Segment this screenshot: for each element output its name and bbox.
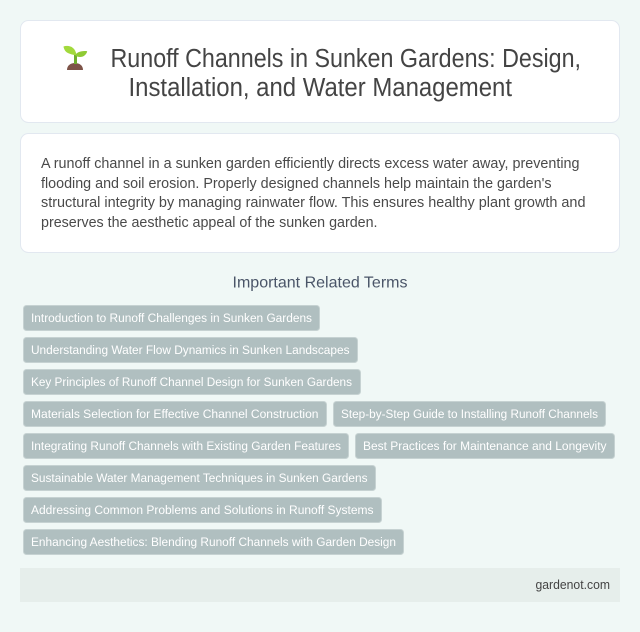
text block: description: structural integrity by managing rainwater flow. This ensures healthy plant growth and bbox=[41, 195, 586, 211]
tag: key principles: Key Principles of Runoff Channel Design for Sunken Gardens bbox=[31, 375, 352, 389]
tag: introduction: Introduction to Runoff Challenges in Sunken Gardens bbox=[31, 311, 312, 325]
tag: introduction bbox=[24, 306, 320, 330]
footer bbox=[20, 568, 620, 602]
tag: enhancing: Enhancing Aesthetics: Blending Runoff Channels with Garden Design bbox=[31, 535, 396, 549]
title: Runoff Channels in Sunken Gardens: Design, bbox=[110, 45, 581, 73]
tag: materials: Materials Selection for Effective Channel Construction bbox=[31, 407, 318, 421]
tag: sustainable bbox=[24, 466, 376, 490]
title bbox=[110, 45, 581, 102]
tag: integrating: Integrating Runoff Channels with Existing Garden Features bbox=[31, 439, 341, 453]
tag: step-by-step: Step-by-Step Guide to Installing Runoff Channels bbox=[341, 407, 598, 421]
heading: important related terms: Important Related Terms bbox=[232, 274, 408, 292]
text block: description: flooding and soil erosion. Properly designed channels help maintain the garden's bbox=[41, 176, 552, 192]
tag: enhancing bbox=[24, 530, 404, 554]
tag: best practices: Best Practices for Maintenance and Longevity bbox=[363, 439, 607, 453]
title: Installation, and Water Management bbox=[128, 74, 512, 102]
tag: step-by-step bbox=[334, 402, 606, 426]
tag: water flow bbox=[24, 338, 358, 362]
tag: key principles bbox=[24, 370, 360, 394]
text block: description: preserves the aesthetic appeal of the sunken garden. bbox=[41, 215, 378, 231]
text block: description: A runoff channel in a sunken garden efficiently directs excess water away, preventing bbox=[41, 156, 580, 172]
panel: title card bbox=[20, 20, 620, 122]
tag: sustainable: Sustainable Water Management Techniques in Sunken Gardens bbox=[31, 471, 368, 485]
tag: water flow: Understanding Water Flow Dynamics in Sunken Landscapes bbox=[31, 343, 350, 357]
tag: best practices bbox=[356, 434, 614, 458]
text block: description bbox=[41, 156, 586, 231]
panel: description bbox=[20, 134, 620, 252]
tag: addressing: Addressing Common Problems and Solutions in Runoff Systems bbox=[31, 503, 374, 517]
tag: addressing bbox=[24, 498, 382, 522]
icon: seedling bbox=[64, 46, 87, 70]
tag: materials bbox=[24, 402, 326, 426]
panel: related term tags bbox=[24, 306, 614, 554]
tag: integrating bbox=[24, 434, 348, 458]
footer: gardenot.com bbox=[536, 578, 610, 592]
